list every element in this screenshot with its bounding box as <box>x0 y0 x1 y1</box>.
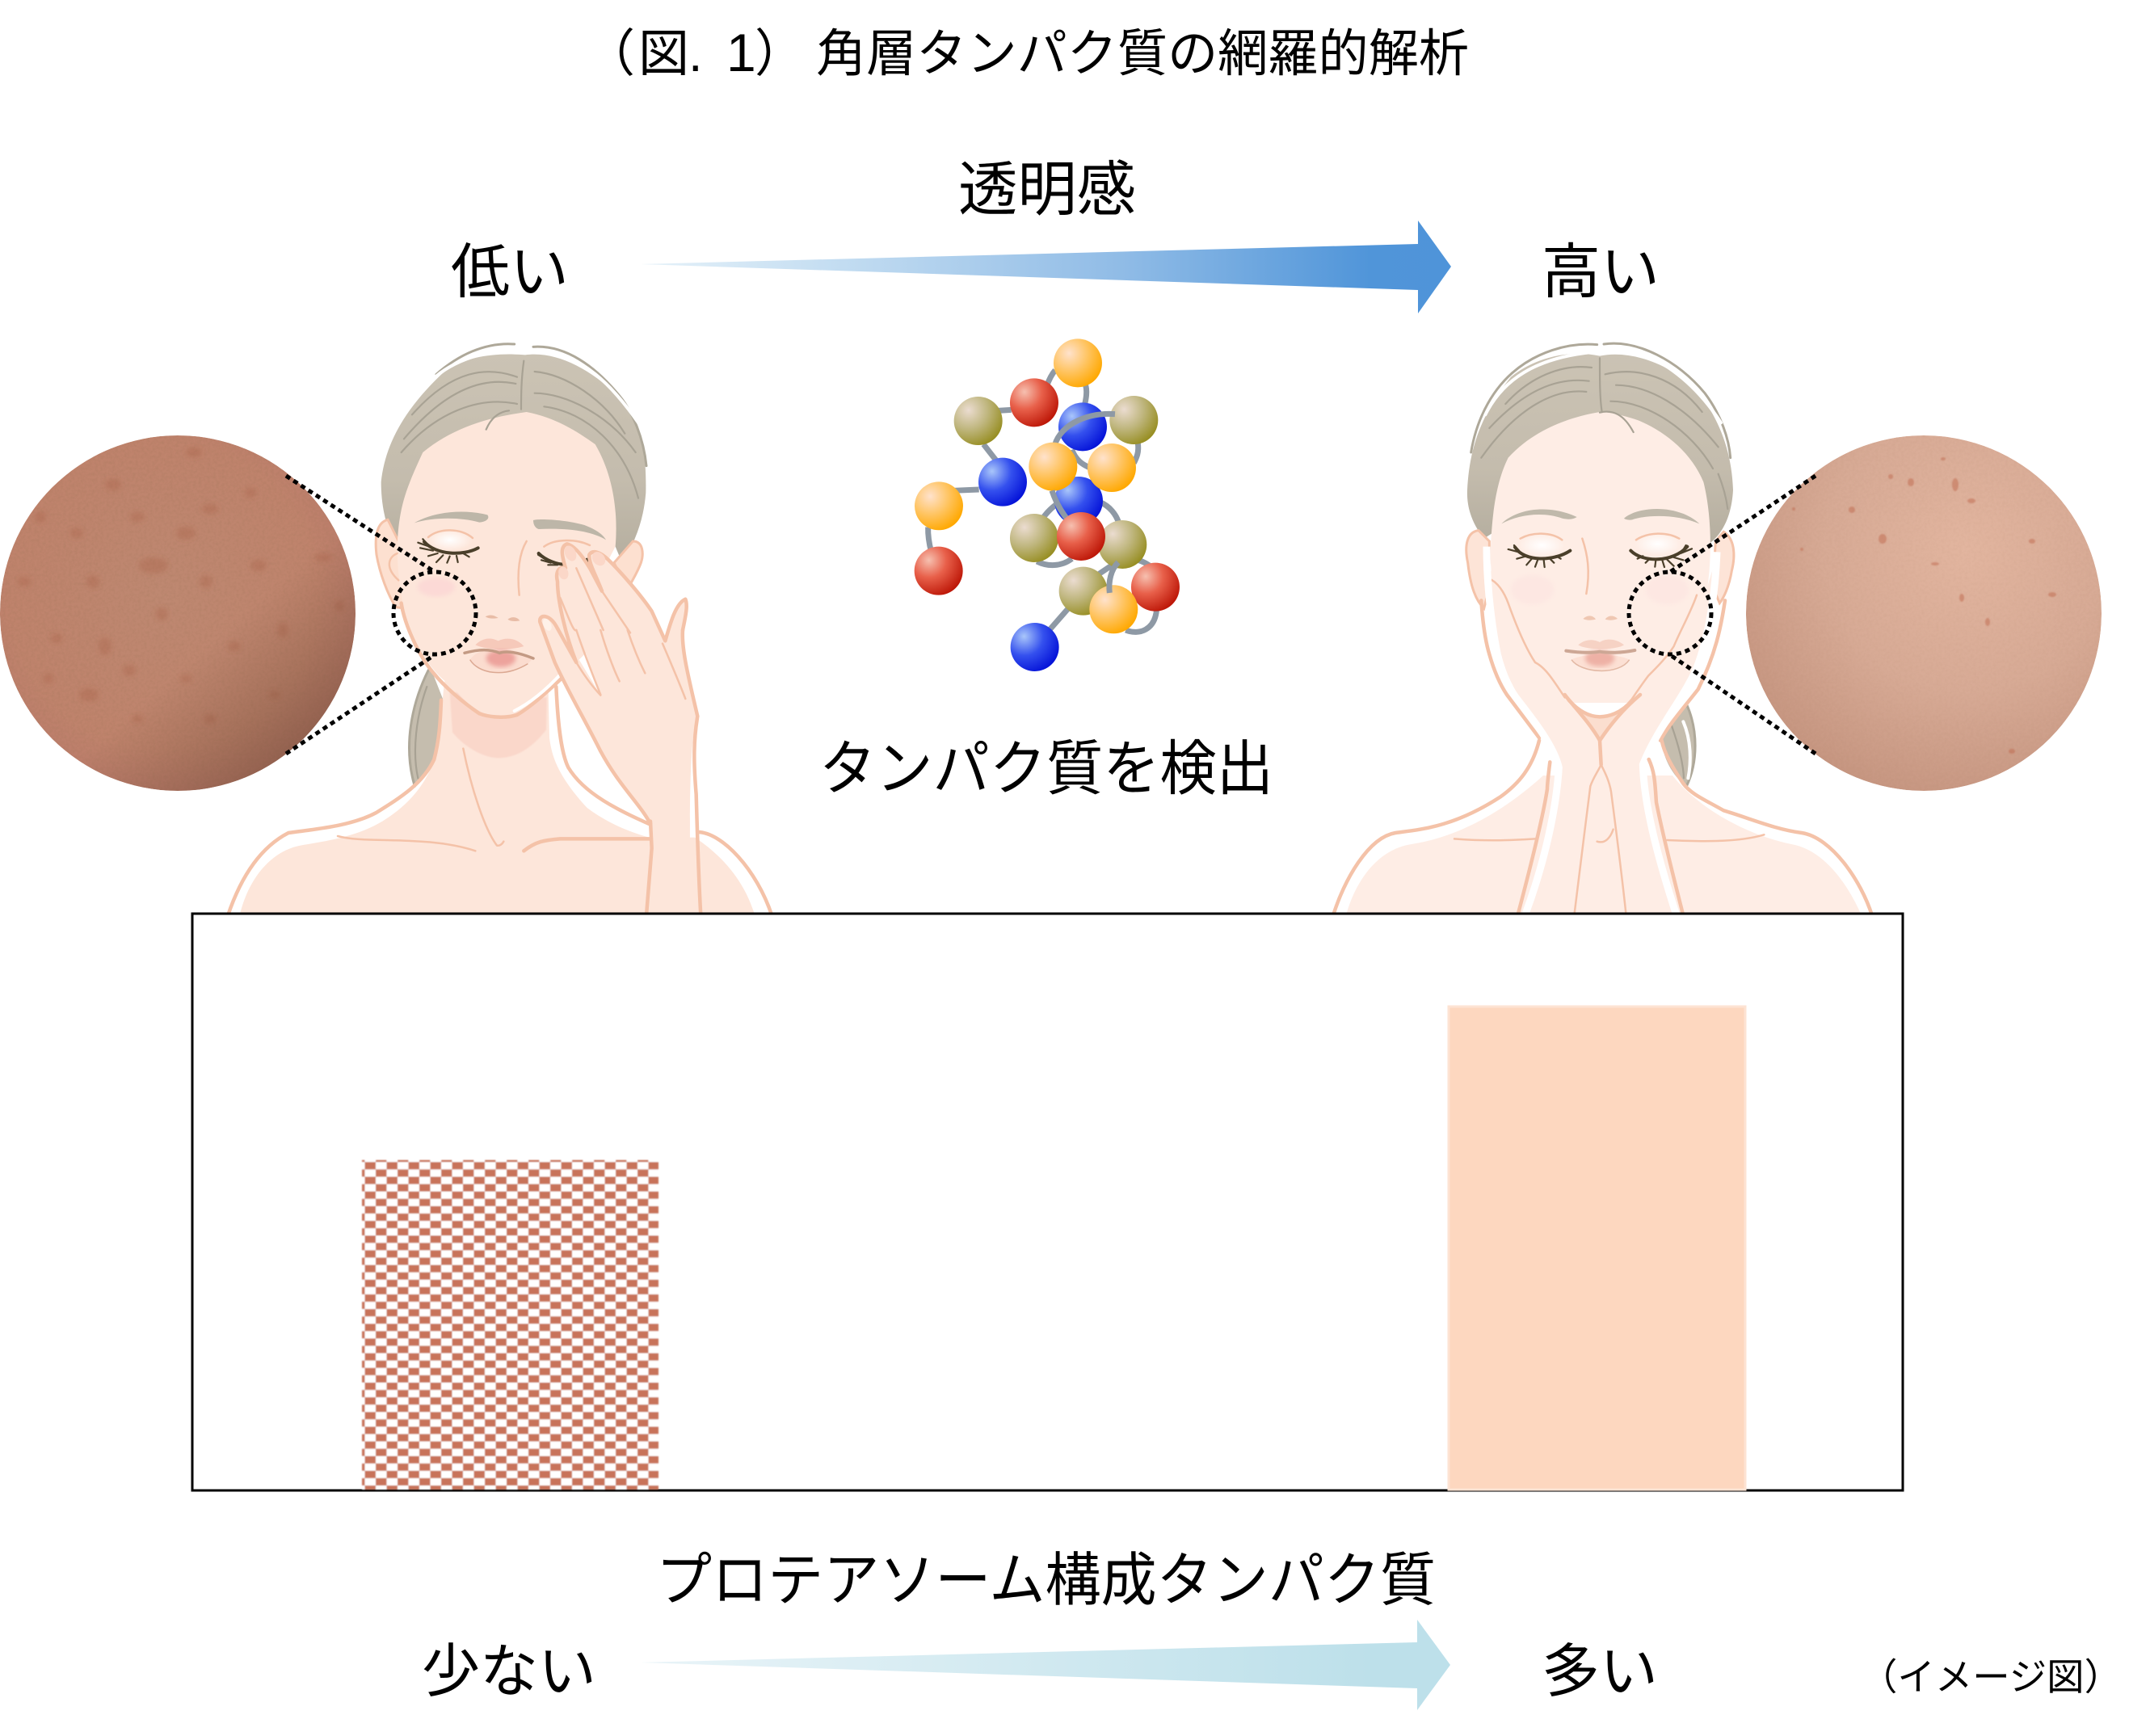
label: low: 低い <box>451 238 569 305</box>
right skin close-up: high transparency <box>1746 435 2102 791</box>
title: . <box>688 26 703 82</box>
label: high: 高い <box>1542 238 1660 305</box>
left zoom callout: dotted circle and lines <box>286 476 476 754</box>
title: 図 <box>638 26 689 82</box>
sphere: blue bottom <box>1011 623 1059 671</box>
sphere: red right <box>1131 563 1180 612</box>
right zoom callout: dotted circle and lines <box>1629 476 1816 754</box>
arrow: transparency <box>641 221 1451 313</box>
sphere: back blue 2 <box>1054 477 1103 525</box>
sphere: orange left <box>915 481 963 530</box>
sphere: olive right <box>1109 396 1158 444</box>
molecule: protein <box>915 338 1180 671</box>
bond: orange to olive <box>1109 562 1118 593</box>
bar: low, checkered <box>362 1160 658 1490</box>
left woman illustration <box>228 344 772 915</box>
sphere: orange top <box>1054 338 1102 387</box>
left skin close-up: low transparency <box>0 435 356 791</box>
bond over sphere <box>1052 490 1069 521</box>
title: ） <box>755 26 806 82</box>
bond over blue <box>1054 414 1115 448</box>
title: 角層タンパク質の網羅的解析 <box>816 26 1469 82</box>
sphere: olive <box>954 397 1003 445</box>
heading: proteasome axis: プロテアソーム構成タンパク質 <box>656 1549 1436 1613</box>
title: （ <box>584 26 635 82</box>
sphere: orange bottom <box>1089 585 1138 633</box>
sphere: orange right <box>1088 443 1136 492</box>
title: 1 <box>726 23 756 82</box>
sphere: red middle <box>1057 512 1105 561</box>
chart frame <box>192 914 1903 1490</box>
sphere: olive middle <box>1010 514 1058 562</box>
sphere: olive bottom <box>1059 567 1108 616</box>
heading: transparency axis: 透明感 <box>958 156 1136 223</box>
sphere: blue <box>978 458 1027 507</box>
sphere: olive lower <box>1098 520 1147 569</box>
note: image diagram: （イメージ図） <box>1860 1656 2122 1698</box>
label: many: 多い <box>1542 1640 1658 1704</box>
sphere: red left <box>915 547 963 595</box>
text: protein detection: タンパク質を検出 <box>819 735 1273 802</box>
label: few: 少ない <box>422 1640 596 1704</box>
bar chart <box>192 914 1903 1490</box>
arrow: proteasome <box>641 1620 1450 1710</box>
sphere: back blue <box>1058 402 1107 451</box>
bar: high, peach <box>1449 1007 1745 1490</box>
right woman illustration <box>1333 343 1872 915</box>
sphere: orange middle <box>1029 443 1077 491</box>
sphere: red <box>1010 378 1058 427</box>
